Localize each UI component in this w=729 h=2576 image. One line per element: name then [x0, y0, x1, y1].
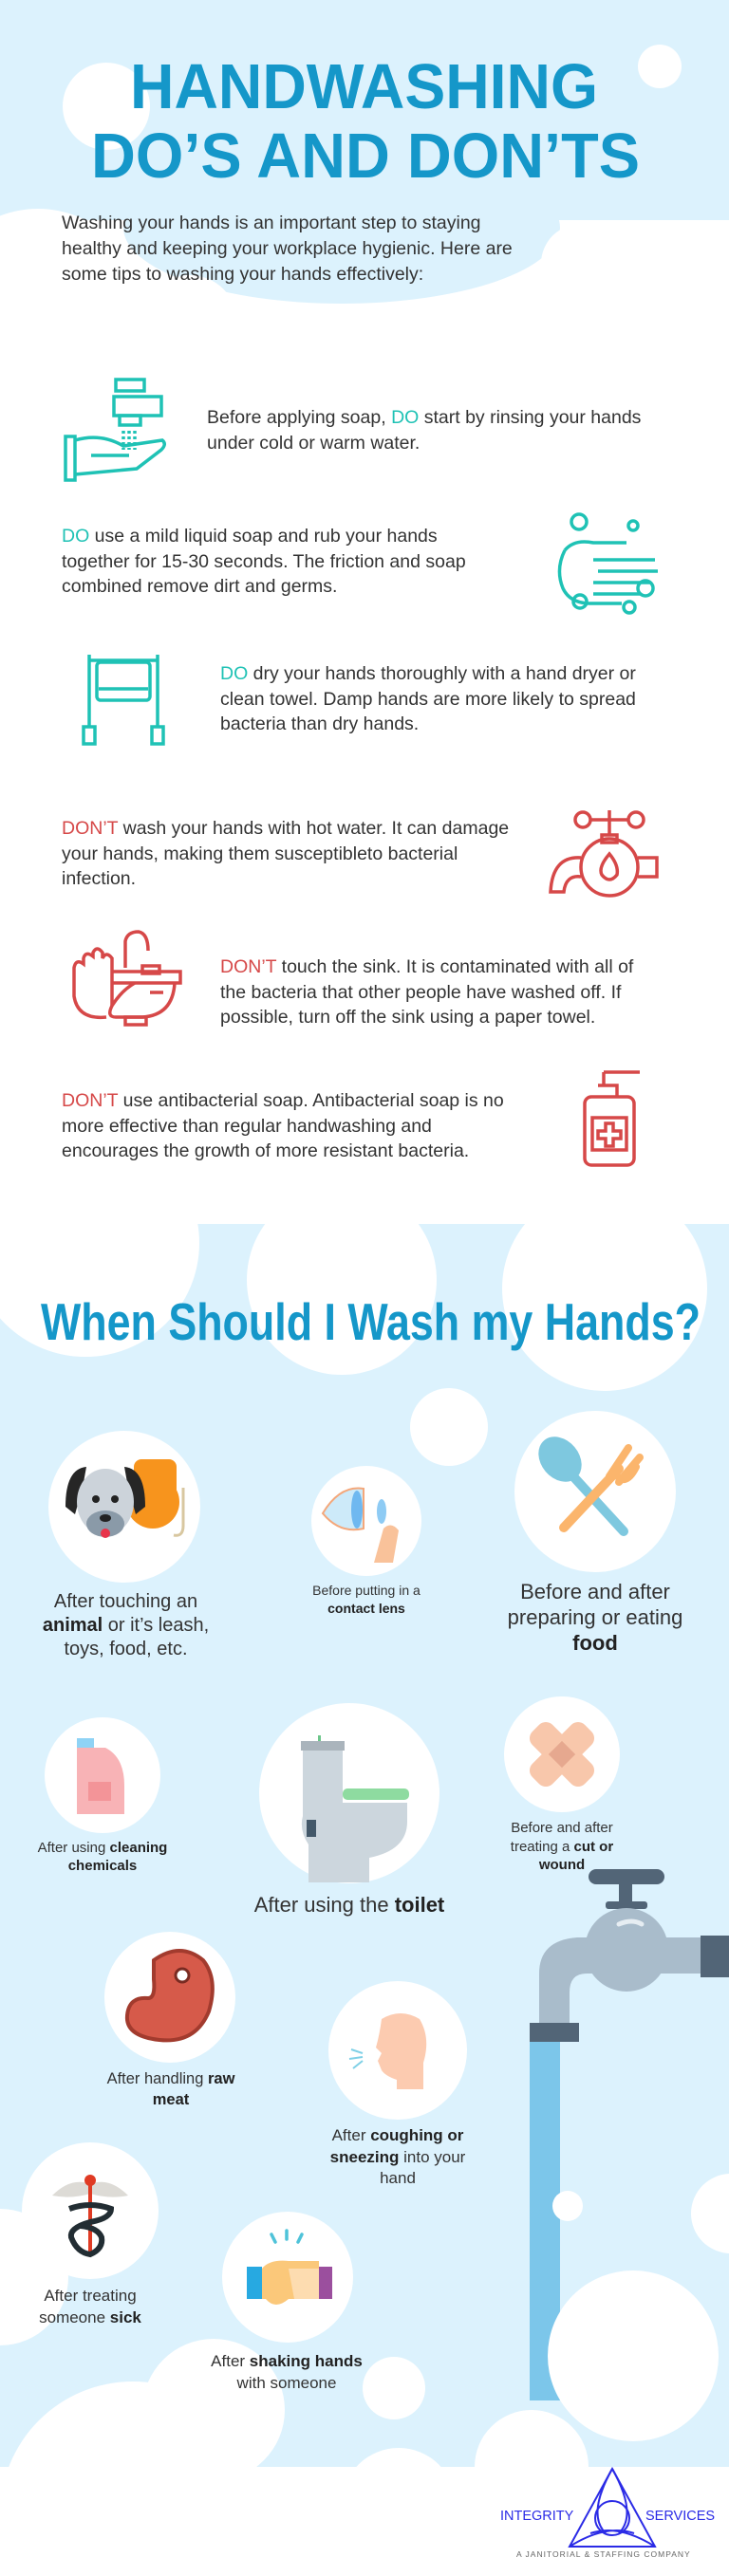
item: toilet [254, 1703, 444, 1917]
caption: hand [380, 2169, 416, 2187]
icon: bandages [504, 1696, 620, 1812]
text: soap: DO use a mild liquid soap and rub your hands [62, 526, 438, 547]
title [91, 51, 640, 190]
logo: SERVICES [645, 2509, 715, 2524]
caption: After treating [44, 2287, 137, 2305]
logo [494, 2467, 721, 2567]
icon: bottle [45, 1717, 160, 1833]
icon: hand and sink [72, 930, 182, 1027]
caption: After touching an [54, 1591, 197, 1612]
caption: Before putting in a [312, 1583, 421, 1598]
icon: hot tap [549, 810, 659, 898]
caption: contact lens [327, 1601, 405, 1616]
icon: face sneezing [328, 1981, 467, 2120]
item: shaking hands [201, 2212, 372, 2392]
item: contact lens [311, 1466, 421, 1616]
caption [38, 1840, 167, 1874]
text: hot water: infection. [62, 868, 136, 889]
item: coughing [328, 1981, 467, 2187]
icon: caduceus [22, 2142, 159, 2279]
caption: toys, food, etc. [64, 1639, 188, 1659]
caption [330, 2126, 465, 2187]
logo mark: triangle knot [568, 2467, 657, 2548]
text: dry: clean towel. Damp hands are more likely to spread [220, 689, 636, 710]
caption [312, 1583, 421, 1616]
caption: After shaking hands [211, 2352, 363, 2370]
icon: toilet [259, 1703, 439, 1883]
icon: meat [104, 1932, 235, 2063]
title: DO’S AND DON’TS [91, 120, 640, 190]
icon: spoon and fork [514, 1411, 676, 1572]
caption: with someone [237, 2374, 336, 2392]
item: animal [43, 1431, 209, 1659]
caption [43, 1591, 209, 1659]
caption: sneezing into your [330, 2148, 465, 2165]
intro text: some tips to washing your hands effectively: [62, 264, 423, 285]
icon: tap and hand [64, 378, 166, 482]
caption [201, 2350, 372, 2394]
text: hot water [62, 818, 509, 889]
text: antibacterial: encourages the growth of more resistant bacteria. [62, 1140, 469, 1161]
item: wound [504, 1696, 620, 1873]
caption: preparing or eating [508, 1605, 682, 1629]
text: hot water: DON’T wash your hands with hot water. It can damage [62, 818, 509, 839]
item: raw meat [104, 1932, 235, 2108]
text: dry [220, 663, 636, 734]
caption: food [572, 1631, 618, 1655]
text: sink: the bacteria that other people have washed off. If [220, 982, 621, 1003]
caption [106, 2070, 235, 2108]
caption: treating a cut or [511, 1839, 613, 1854]
text: antibacterial: more effective than regular handwashing and [62, 1116, 432, 1137]
intro text: Washing your hands is an important step to staying [62, 213, 481, 233]
icon: handshake [222, 2212, 353, 2343]
icon: soap bottle [583, 1070, 640, 1167]
text: dry: bacteria than dry hands. [220, 713, 419, 734]
text: sink [220, 956, 634, 1028]
text: soap: combined remove dirt and germs. [62, 576, 337, 597]
item: sick [19, 2142, 161, 2328]
icon: dog [48, 1431, 200, 1583]
item: food [508, 1411, 682, 1655]
caption: Before and after [520, 1580, 670, 1603]
caption: After using cleaning [38, 1840, 167, 1856]
caption [508, 1580, 682, 1655]
text: sink: DON’T touch the sink. It is contaminated with all of [220, 956, 633, 977]
item: chemicals [38, 1717, 167, 1874]
icon: soapy hands [558, 512, 658, 615]
caption: chemicals [68, 1858, 137, 1874]
caption [19, 2285, 161, 2328]
caption: After handling raw [107, 2070, 234, 2087]
text: rinse [207, 407, 641, 454]
caption: wound [539, 1857, 585, 1873]
caption [511, 1820, 613, 1873]
intro text [62, 213, 513, 285]
icon: towel [82, 655, 165, 746]
text: antibacterial: DON’T use antibacterial soap. Antibacterial soap is no [62, 1090, 504, 1111]
text: hot water: your hands, making them susceptibleto bacterial [62, 843, 458, 864]
caption: After coughing or [332, 2126, 463, 2144]
logo text: INTEGRITY [500, 2509, 573, 2524]
text: sink: possible, turn off the sink using a paper towel. [220, 1007, 595, 1028]
caption: someone sick [39, 2308, 141, 2326]
caption: animal or it’s leash, [43, 1615, 209, 1636]
text: antibacterial [62, 1090, 504, 1161]
caption: meat [153, 2091, 189, 2108]
logo: A JANITORIAL & STAFFING COMPANY [516, 2549, 691, 2559]
title: HANDWASHING [130, 51, 598, 122]
caption: After using the toilet [254, 1893, 444, 1917]
text: soap: together for 15-30 seconds. The friction and soap [62, 551, 466, 572]
text: rinse: under cold or warm water. [207, 433, 420, 454]
text: rinse: Before applying soap, DO start by rinsing your hands [207, 407, 641, 428]
icon: faucet [530, 1869, 729, 2042]
caption: Before and after [511, 1820, 613, 1836]
text: soap [62, 526, 466, 597]
intro text: healthy and keeping your workplace hygienic. Here are [62, 238, 513, 259]
text: dry: DO dry your hands thoroughly with a hand dryer or [220, 663, 636, 684]
water stream [530, 2040, 560, 2400]
icon: eye [311, 1466, 421, 1576]
